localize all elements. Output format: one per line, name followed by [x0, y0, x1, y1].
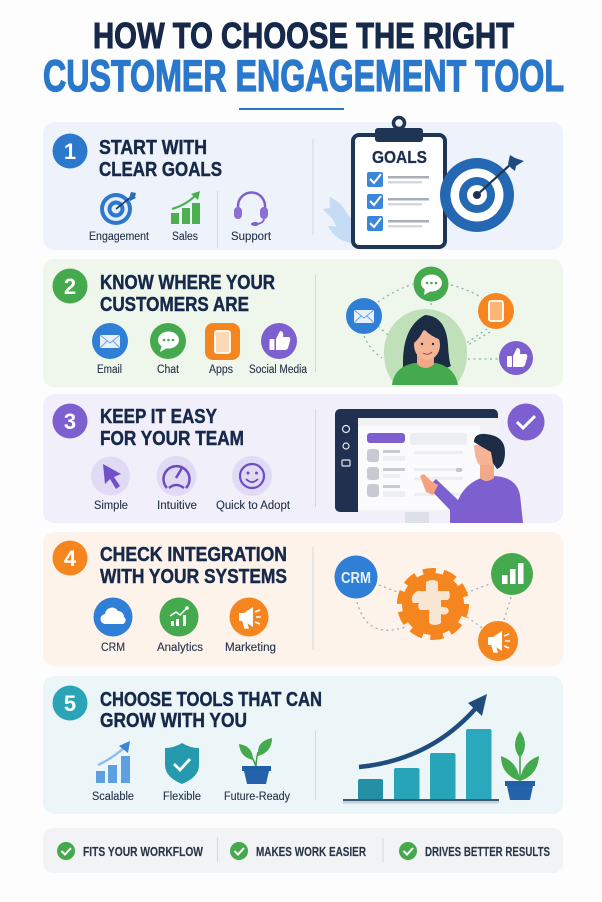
- panel 1: start with clear goals: [43, 118, 563, 250]
- heading 5: [100, 689, 322, 732]
- badge 2: 2: [64, 274, 76, 299]
- label crm: CRM: [101, 642, 125, 654]
- panel 5: choose tools that can grow with you: [43, 676, 563, 814]
- badge 1: 1: [64, 139, 76, 164]
- heading 3: KEEP IT EASY: [100, 406, 218, 428]
- badge 2: [52, 268, 88, 304]
- illustration: man pointing: [420, 434, 523, 523]
- heading 5: GROW WITH YOU: [100, 710, 247, 732]
- node: analytics: [491, 553, 533, 595]
- title: [43, 15, 564, 101]
- heading 4: [100, 544, 287, 588]
- icon: engagement target: [100, 192, 136, 225]
- icon: email: [92, 323, 128, 359]
- icon: marketing megaphone: [230, 598, 268, 636]
- heading 1: CLEAR GOALS: [99, 159, 222, 181]
- illustration: goals clipboard: GOALS: [372, 147, 427, 167]
- illustration: monitor: [335, 409, 498, 523]
- bar chart: [343, 729, 499, 804]
- icon: scalable chart: [96, 741, 130, 783]
- label chat: Chat: [157, 364, 180, 376]
- illustration: goals clipboard: [353, 118, 445, 247]
- icon: analytics: [160, 598, 198, 636]
- label email: Email: [97, 364, 122, 376]
- node: tablet: [478, 293, 514, 329]
- node: marketing: [478, 621, 518, 661]
- illustration: connection lines: [357, 583, 511, 630]
- icon: intuitive gauge: [156, 456, 196, 496]
- icon: future-ready plant: [239, 738, 272, 784]
- node: email: [346, 298, 382, 334]
- panel 3: keep it easy for your team: [43, 394, 563, 523]
- heading 4: WITH YOUR SYSTEMS: [100, 566, 287, 588]
- benefit: drives better results: [399, 842, 550, 860]
- icon: check badge: [508, 404, 544, 440]
- icon: apps: [205, 323, 240, 360]
- label social media: Social Media: [249, 364, 308, 376]
- label quick to adopt: Quick to Adopt: [216, 500, 291, 512]
- illustration: gear with puzzle: [401, 572, 465, 636]
- badge 1: [52, 134, 88, 168]
- badge 4: [52, 540, 88, 576]
- icon: quick to adopt smile: [232, 456, 272, 496]
- benefit: fits your workflow: FITS YOUR WORKFLOW: [83, 845, 203, 859]
- benefit: makes work easier: [230, 842, 366, 860]
- illustration: plant: [501, 731, 539, 800]
- arrow: growth: [359, 694, 487, 767]
- panel 4: check integration with your systems: [43, 532, 563, 666]
- icon: social media: [261, 323, 297, 359]
- icon: flexible shield: [165, 743, 199, 784]
- node: crm: [334, 556, 378, 598]
- heading 3: [100, 406, 244, 450]
- label future-ready: Future-Ready: [224, 791, 290, 803]
- heading 2: CUSTOMERS ARE: [100, 294, 249, 316]
- icon: leaves: [323, 197, 351, 243]
- label marketing: Marketing: [225, 642, 276, 654]
- label scalable: Scalable: [92, 791, 134, 803]
- node: crm: CRM: [341, 570, 371, 587]
- label intuitive: Intuitive: [157, 500, 197, 512]
- heading 4: CHECK INTEGRATION: [100, 544, 287, 566]
- heading 2: KNOW WHERE YOUR: [100, 272, 275, 294]
- label flexible: Flexible: [163, 791, 201, 803]
- icon: simple cursor: [91, 456, 130, 496]
- bottom strip: benefits: [43, 828, 563, 873]
- benefit: drives better results: DRIVES BETTER RESULTS: [425, 845, 550, 859]
- icon: crm cloud: [94, 598, 132, 636]
- badge 4: 4: [64, 546, 77, 571]
- label sales: Sales: [172, 231, 198, 243]
- heading 1: START WITH: [99, 137, 207, 159]
- illustration: customer: [384, 309, 467, 385]
- heading 1: [99, 137, 222, 181]
- illustration: big target: [440, 155, 524, 232]
- title: HOW TO CHOOSE THE RIGHT: [93, 15, 514, 56]
- icon: sales chart: [171, 191, 200, 224]
- badge 3: 3: [64, 409, 76, 434]
- node: chat: [414, 266, 448, 302]
- node: thumbs up: [499, 341, 533, 375]
- label apps: Apps: [209, 364, 233, 376]
- panel 2: know where your customers are: [43, 259, 563, 387]
- label analytics: Analytics: [157, 642, 203, 654]
- badge 3: [52, 404, 88, 438]
- label simple: Simple: [94, 500, 128, 512]
- heading 5: CHOOSE TOOLS THAT CAN: [100, 689, 322, 711]
- label engagement: Engagement: [89, 231, 150, 243]
- icon: support headset: [234, 192, 268, 226]
- badge 5: [52, 686, 88, 720]
- label support: Support: [231, 231, 272, 243]
- benefit: makes work easier: MAKES WORK EASIER: [256, 845, 366, 859]
- heading 2: [100, 272, 275, 316]
- illustration: connection lines: [364, 284, 498, 359]
- badge 5: 5: [64, 691, 76, 716]
- benefit: fits your workflow: [57, 842, 203, 860]
- heading 3: FOR YOUR TEAM: [100, 428, 244, 450]
- icon: chat: [150, 323, 186, 359]
